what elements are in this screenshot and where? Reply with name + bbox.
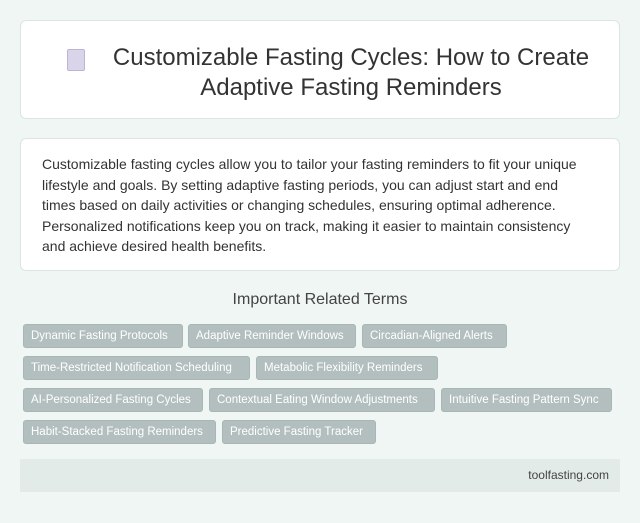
- header card: [20, 20, 620, 119]
- tags: Predictive Fasting Tracker: [230, 426, 363, 438]
- section heading: Important Related Terms: [233, 291, 407, 308]
- tags: Metabolic Flexibility Reminders: [264, 362, 422, 374]
- icon: document: [67, 49, 85, 71]
- description text: Customizable fasting cycles allow you to tailor your fasting reminders to fit your unique lifestyle and goals. By setting adaptive fasting periods, you can adjust start and end times based on daily activities or changing schedules, ensuring optimal adherence. Personalized notifications keep you on track, making it easier to maintain consistency and achieve desired health benefits.: [42, 156, 577, 254]
- tags: AI-Personalized Fasting Cycles: [31, 394, 191, 406]
- title: Customizable Fasting Cycles: How to Create Adaptive Fasting Reminders: [113, 44, 589, 101]
- description card: [20, 138, 620, 271]
- tags: Habit-Stacked Fasting Reminders: [31, 426, 203, 438]
- tags: Contextual Eating Window Adjustments: [217, 394, 418, 406]
- tags: Circadian-Aligned Alerts: [370, 330, 493, 342]
- tags: Adaptive Reminder Windows: [196, 330, 344, 342]
- tags: Dynamic Fasting Protocols: [31, 330, 168, 342]
- footer: [20, 459, 620, 492]
- footer: toolfasting.com: [528, 468, 609, 482]
- tags: Intuitive Fasting Pattern Sync: [449, 394, 599, 406]
- tags: Time-Restricted Notification Scheduling: [31, 362, 232, 374]
